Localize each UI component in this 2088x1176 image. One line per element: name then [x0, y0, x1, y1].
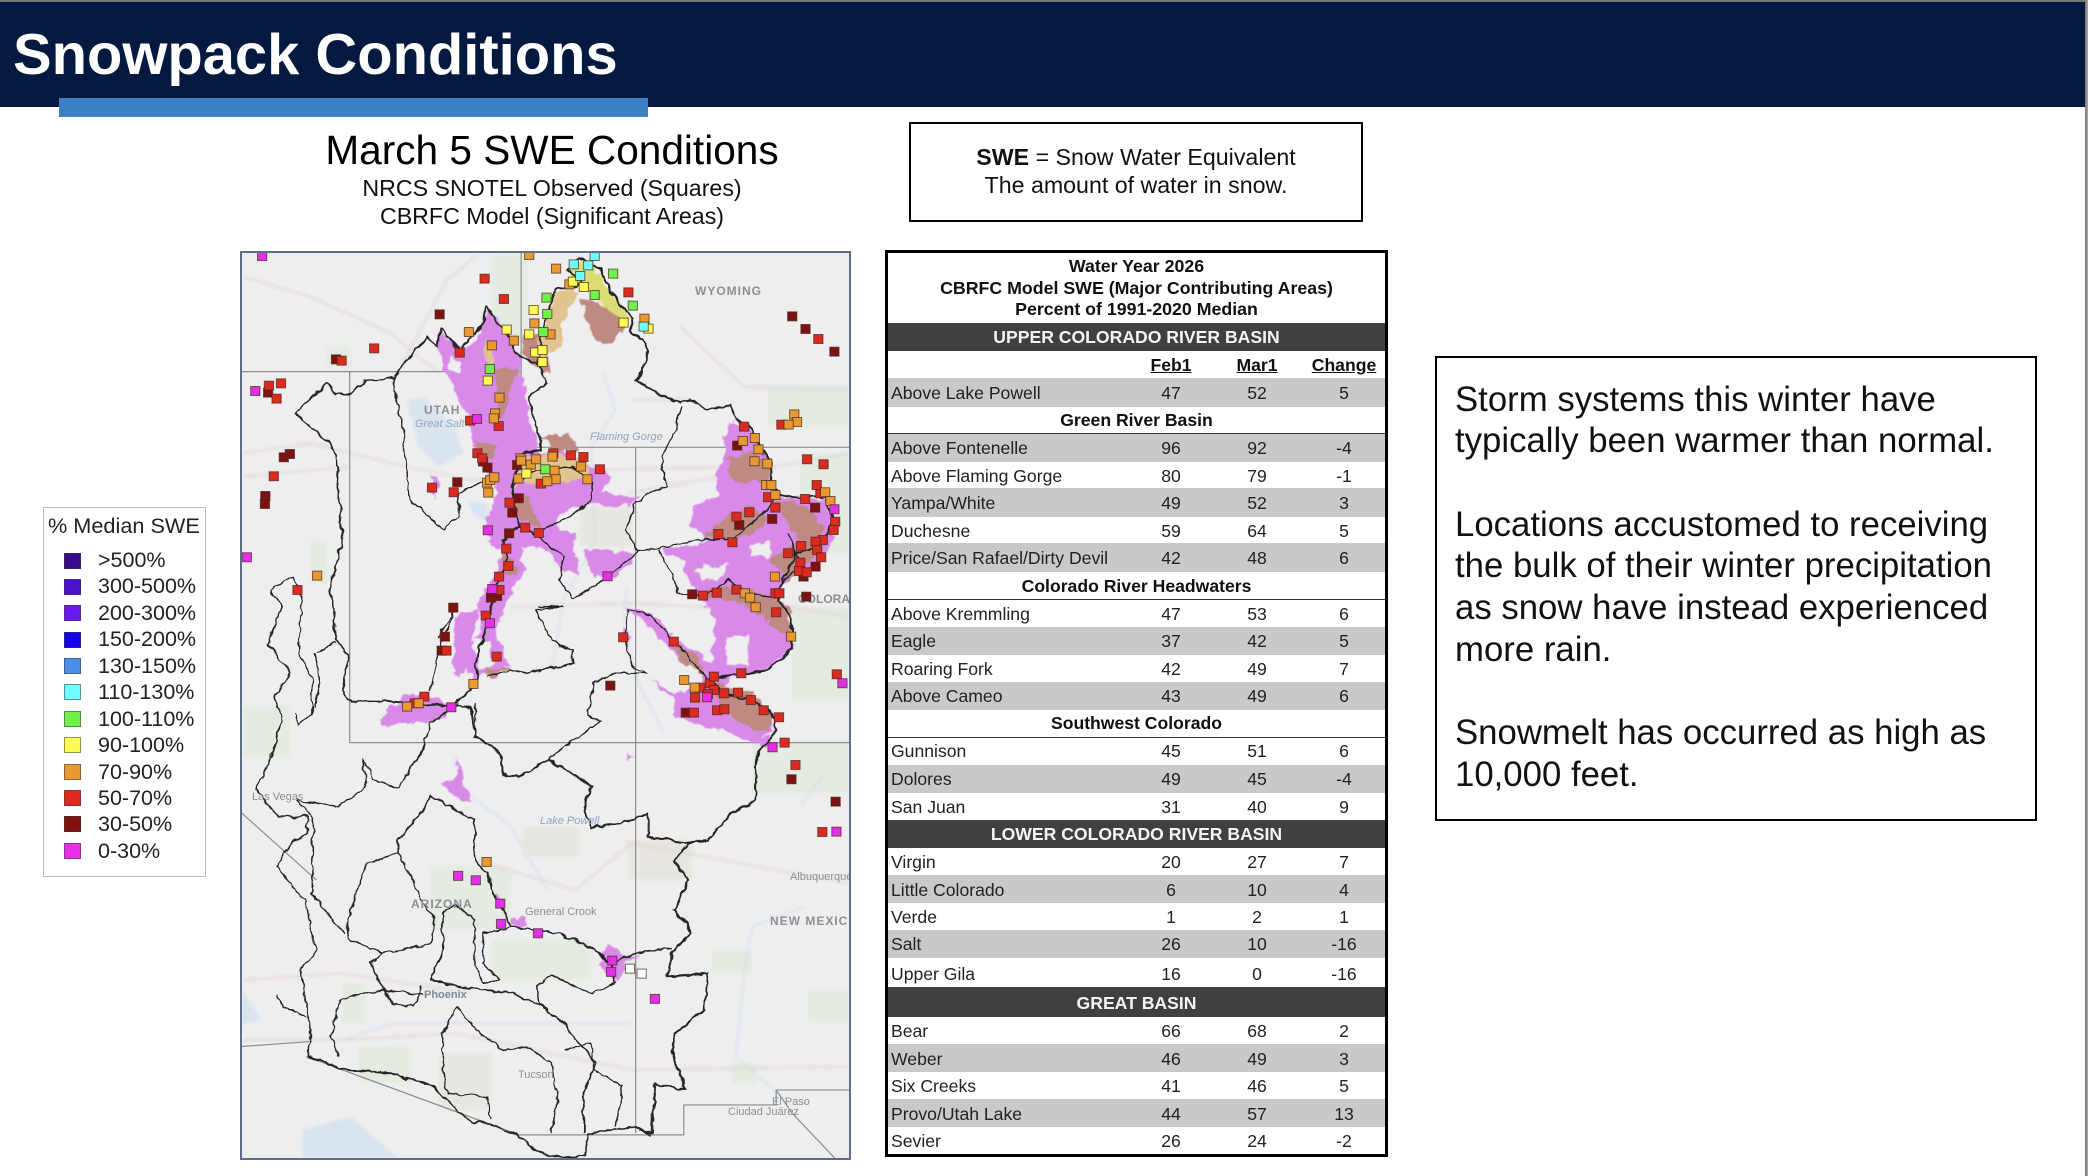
data table: CBRFC Model SWE: -16	[1331, 964, 1357, 984]
data table: CBRFC Model SWE: 68	[1247, 1021, 1267, 1041]
legend: % Median SWE: >500%	[98, 548, 166, 572]
title: Snowpack Conditions	[13, 22, 618, 86]
data table: CBRFC Model SWE: 20	[1161, 852, 1181, 872]
squares: no data	[625, 964, 646, 978]
data table: CBRFC Model SWE: 79	[1247, 466, 1267, 486]
text callout: winter storm summary: as snow have instead experienced	[1455, 589, 1988, 627]
map place labels: El Paso	[772, 1096, 810, 1108]
model area: 70-90% of median	[483, 290, 591, 493]
data table: CBRFC Model SWE: 47	[1161, 604, 1181, 624]
squares: 0-30%	[242, 251, 847, 1003]
table title: Water Year 2026	[1069, 256, 1204, 276]
data table: CBRFC Model SWE: 0	[1252, 964, 1262, 984]
text callout: winter storm summary: the bulk of their winter precipitation	[1455, 547, 1992, 585]
squares: 50-70%	[264, 274, 841, 836]
map place labels: Tucson	[518, 1069, 554, 1081]
subsection: Colorado River Headwaters: Colorado River Headwaters	[1022, 576, 1251, 596]
legend: % Median SWE: 70-90%	[98, 760, 172, 784]
data table: CBRFC Model SWE: 3	[1339, 1049, 1349, 1069]
data table: CBRFC Model SWE: Dolores	[891, 769, 952, 789]
map place labels: Albuquerque	[790, 871, 852, 883]
legend title: % Median SWE	[48, 513, 200, 538]
column headers: Mar1	[1236, 355, 1278, 375]
snow model areas: 0-30% and 30-50% and 70-90%	[379, 260, 832, 982]
data table: CBRFC Model SWE: Above Cameo	[891, 686, 1002, 706]
data table: CBRFC Model SWE: 52	[1247, 383, 1267, 403]
map place labels: Phoenix	[424, 989, 468, 1001]
data table: CBRFC Model SWE: 5	[1339, 631, 1349, 651]
map heading	[325, 127, 779, 229]
legend: % Median SWE: 30-50%	[98, 812, 172, 836]
data table: CBRFC Model SWE: Virgin	[891, 852, 936, 872]
header band	[0, 0, 2085, 107]
data table: CBRFC Model SWE: 66	[1161, 1021, 1181, 1041]
data table: CBRFC Model SWE: 24	[1247, 1131, 1267, 1151]
legend: % Median SWE: 150-200%	[98, 627, 196, 651]
data table: CBRFC Model SWE: 49	[1247, 1049, 1267, 1069]
data table: CBRFC Model SWE: 48	[1247, 548, 1267, 568]
map place labels: UTAH	[424, 403, 460, 417]
data table: CBRFC Model SWE: 41	[1161, 1076, 1181, 1096]
data table: CBRFC Model SWE: 31	[1161, 797, 1181, 817]
data table: CBRFC Model SWE: 7	[1339, 659, 1349, 679]
data table: CBRFC Model SWE: 3	[1339, 493, 1349, 513]
section: Lower Colorado River Basin	[888, 820, 1385, 848]
legend: % Median SWE: 300-500%	[98, 574, 196, 598]
data table: CBRFC Model SWE: 49	[1161, 769, 1181, 789]
data table: CBRFC Model SWE: 2	[1252, 907, 1262, 927]
text callout: winter storm summary: more rain.	[1455, 631, 1611, 669]
model area: 90-110% of median	[567, 260, 632, 327]
map place labels: Flaming Gorge	[590, 431, 663, 443]
right edge strip	[2085, 0, 2088, 1176]
legend: % Median SWE: 110-130%	[98, 680, 194, 704]
data table: CBRFC Model SWE: 42	[1161, 548, 1181, 568]
map place labels	[252, 284, 859, 1118]
table title	[940, 256, 1333, 319]
legend: % Median SWE: 200-300%	[98, 600, 196, 624]
table title: CBRFC Model SWE (Major Contributing Areas)	[940, 278, 1333, 298]
SWE definition box: SWE = Snow Water Equivalent	[976, 144, 1296, 170]
subheading lines: NRCS SNOTEL Observed (Squares)	[362, 174, 742, 200]
data table: CBRFC Model SWE: 96	[1161, 438, 1181, 458]
data table: CBRFC Model SWE: 42	[1161, 659, 1181, 679]
squares: 70-90%	[313, 250, 835, 866]
SNOTEL squares	[242, 250, 847, 1003]
text callout: winter storm summary: Storm systems this winter have	[1455, 380, 1936, 418]
data table: CBRFC Model SWE: 6	[1339, 548, 1349, 568]
map place labels: ARIZONA	[411, 897, 473, 911]
squares: 90-100%	[483, 277, 653, 478]
data table: CBRFC Model SWE: 9	[1339, 797, 1349, 817]
data table: CBRFC Model SWE: 40	[1247, 797, 1267, 817]
section: Upper Colorado River Basin: UPPER COLORADO RIVER BASIN	[993, 327, 1280, 347]
map place labels: Ciudad Juárez	[728, 1106, 799, 1118]
data table: CBRFC Model SWE: 10	[1247, 880, 1267, 900]
data table: CBRFC Model SWE: 26	[1161, 1131, 1181, 1151]
data table: CBRFC Model SWE: 7	[1339, 852, 1349, 872]
data table: CBRFC Model SWE: 44	[1161, 1104, 1181, 1124]
text callout: winter storm summary: 10,000 feet.	[1455, 756, 1639, 794]
data table: CBRFC Model SWE: 53	[1247, 604, 1267, 624]
data table: CBRFC Model SWE: Price/San Rafael/Dirty Devil	[891, 548, 1108, 568]
data table: CBRFC Model SWE: 80	[1161, 466, 1181, 486]
holes in model coverage	[449, 353, 800, 670]
data table: CBRFC Model SWE: 37	[1161, 631, 1181, 651]
data table: CBRFC Model SWE: 49	[1161, 493, 1181, 513]
data table: CBRFC Model SWE: 92	[1247, 438, 1267, 458]
subheading lines: CBRFC Model (Significant Areas)	[380, 202, 724, 228]
data table: CBRFC Model SWE: 6	[1339, 741, 1349, 761]
subsection: Southwest Colorado	[888, 710, 1385, 738]
data table: CBRFC Model SWE: Weber	[891, 1049, 943, 1069]
data table: CBRFC Model SWE: San Juan	[891, 797, 965, 817]
data table: CBRFC Model SWE: 49	[1247, 686, 1267, 706]
data table: CBRFC Model SWE: 42	[1247, 631, 1267, 651]
data table: CBRFC Model SWE: -2	[1336, 1131, 1352, 1151]
data table: CBRFC Model SWE: -16	[1331, 934, 1357, 954]
data table: CBRFC Model SWE: Roaring Fork	[891, 659, 993, 679]
data table: CBRFC Model SWE: 10	[1247, 934, 1267, 954]
data table: CBRFC Model SWE: 5	[1339, 521, 1349, 541]
data table: CBRFC Model SWE	[885, 250, 1388, 1157]
data table: CBRFC Model SWE: Above Kremmling	[891, 604, 1030, 624]
squares: 110-130%	[569, 251, 648, 331]
map place labels: WYOMING	[695, 284, 762, 298]
data table: CBRFC Model SWE: 6	[1339, 604, 1349, 624]
data table: CBRFC Model SWE: 5	[1339, 383, 1349, 403]
data table: CBRFC Model SWE: 43	[1161, 686, 1181, 706]
data table: CBRFC Model SWE: Above Flaming Gorge	[891, 466, 1062, 486]
data table: CBRFC Model SWE: Little Colorado	[891, 880, 1004, 900]
map place labels: General Crook	[525, 906, 597, 918]
legend: % Median SWE: 50-70%	[98, 786, 172, 810]
data table: CBRFC Model SWE: 27	[1247, 852, 1267, 872]
data table: CBRFC Model SWE: 45	[1247, 769, 1267, 789]
data table: CBRFC Model SWE: Duchesne	[891, 521, 970, 541]
data table: CBRFC Model SWE: Sevier	[891, 1131, 941, 1151]
terrain, forests and water	[242, 253, 848, 1158]
data table: CBRFC Model SWE: 45	[1161, 741, 1181, 761]
data table: CBRFC Model SWE: Above Lake Powell	[891, 383, 1041, 403]
subsection: Green River Basin: Green River Basin	[1060, 410, 1213, 430]
column headers: Feb1	[1150, 355, 1192, 375]
data table: CBRFC Model SWE: 6	[1166, 880, 1176, 900]
data table: CBRFC Model SWE: Bear	[891, 1021, 928, 1041]
data table: CBRFC Model SWE: 52	[1247, 493, 1267, 513]
map place labels: COLORA	[798, 592, 850, 606]
data table: CBRFC Model SWE: Upper Gila	[891, 964, 975, 984]
model area: 30-50% of median	[475, 297, 824, 730]
SWE definition box	[909, 122, 1363, 222]
map place labels: NEW MEXICO	[770, 914, 859, 928]
text callout: winter storm summary: typically been warmer than normal.	[1455, 422, 1994, 460]
data table: CBRFC Model SWE: 46	[1161, 1049, 1181, 1069]
text callout: winter storm summary	[1435, 356, 2037, 821]
data table: CBRFC Model SWE: 64	[1247, 521, 1267, 541]
data table: CBRFC Model SWE: Eagle	[891, 631, 936, 651]
data table: CBRFC Model SWE: Yampa/White	[891, 493, 995, 513]
data table: CBRFC Model SWE: 1	[1166, 907, 1176, 927]
map place labels: Lake Powell	[540, 815, 600, 827]
data table: CBRFC Model SWE: 13	[1334, 1104, 1354, 1124]
data table: CBRFC Model SWE: Six Creeks	[891, 1076, 976, 1096]
map frame	[241, 252, 850, 1159]
data table: CBRFC Model SWE: 4	[1339, 880, 1349, 900]
data table: CBRFC Model SWE: Verde	[891, 907, 937, 927]
accent bar	[58, 98, 648, 117]
legend: % Median SWE: 90-100%	[98, 733, 184, 757]
subsection: Colorado River Headwaters	[888, 572, 1385, 600]
heading: March 5 SWE Conditions: March 5 SWE Conditions	[325, 127, 779, 173]
legend: % Median SWE: 0-30%	[98, 839, 160, 863]
data table: CBRFC Model SWE: 46	[1247, 1076, 1267, 1096]
squares: 100-110%	[485, 269, 637, 474]
data table: CBRFC Model SWE: Salt	[891, 934, 921, 954]
map place labels: Great Salt	[415, 418, 465, 430]
SWE definition box: The amount of water in snow.	[985, 172, 1287, 198]
text callout: winter storm summary: Snowmelt has occurred as high as	[1455, 714, 1986, 752]
data table: CBRFC Model SWE: -1	[1336, 466, 1352, 486]
legend: % Median SWE: 130-150%	[98, 654, 196, 678]
data table: CBRFC Model SWE: 49	[1247, 659, 1267, 679]
section: Lower Colorado River Basin: LOWER COLORADO RIVER BASIN	[991, 824, 1282, 844]
column headers: Change	[1312, 355, 1376, 375]
data table: CBRFC Model SWE: 1	[1339, 907, 1349, 927]
section: Upper Colorado River Basin	[888, 323, 1385, 351]
text callout: winter storm summary: Locations accustomed to receiving	[1455, 506, 1988, 544]
map place labels: Las Vegas	[252, 791, 304, 803]
data table: CBRFC Model SWE: 57	[1247, 1104, 1267, 1124]
data table: CBRFC Model SWE: 59	[1161, 521, 1181, 541]
subheading lines	[362, 174, 742, 229]
data table: CBRFC Model SWE: 6	[1339, 686, 1349, 706]
map: SWE conditions over the Colorado River basin	[240, 251, 851, 1160]
table title: Percent of 1991-2020 Median	[1015, 299, 1258, 319]
legend: % Median SWE	[43, 507, 206, 877]
data table: CBRFC Model SWE: Above Fontenelle	[891, 438, 1028, 458]
squares: 30-50%	[260, 310, 840, 806]
data table: CBRFC Model SWE: 26	[1161, 934, 1181, 954]
section: Great Basin: GREAT BASIN	[1077, 993, 1196, 1013]
data table: CBRFC Model SWE: 5	[1339, 1076, 1349, 1096]
section: Great Basin	[888, 987, 1385, 1017]
map base	[241, 252, 850, 1159]
column headers	[1150, 355, 1376, 375]
state lines	[240, 251, 850, 1160]
data table: CBRFC Model SWE: Gunnison	[891, 741, 966, 761]
data table: CBRFC Model SWE: 16	[1161, 964, 1181, 984]
model area: 0-30% of median	[379, 308, 832, 982]
data table: CBRFC Model SWE: Provo/Utah Lake	[891, 1104, 1022, 1124]
data table: CBRFC Model SWE: 47	[1161, 383, 1181, 403]
data table: CBRFC Model SWE: 2	[1339, 1021, 1349, 1041]
legend: % Median SWE: 100-110%	[98, 706, 194, 730]
data table: CBRFC Model SWE: -4	[1336, 769, 1352, 789]
basin outlines	[256, 258, 832, 1157]
subsection: Southwest Colorado: Southwest Colorado	[1051, 713, 1222, 733]
data table: CBRFC Model SWE: 51	[1247, 741, 1267, 761]
data table: CBRFC Model SWE: -4	[1336, 438, 1352, 458]
subsection: Green River Basin	[888, 407, 1385, 434]
